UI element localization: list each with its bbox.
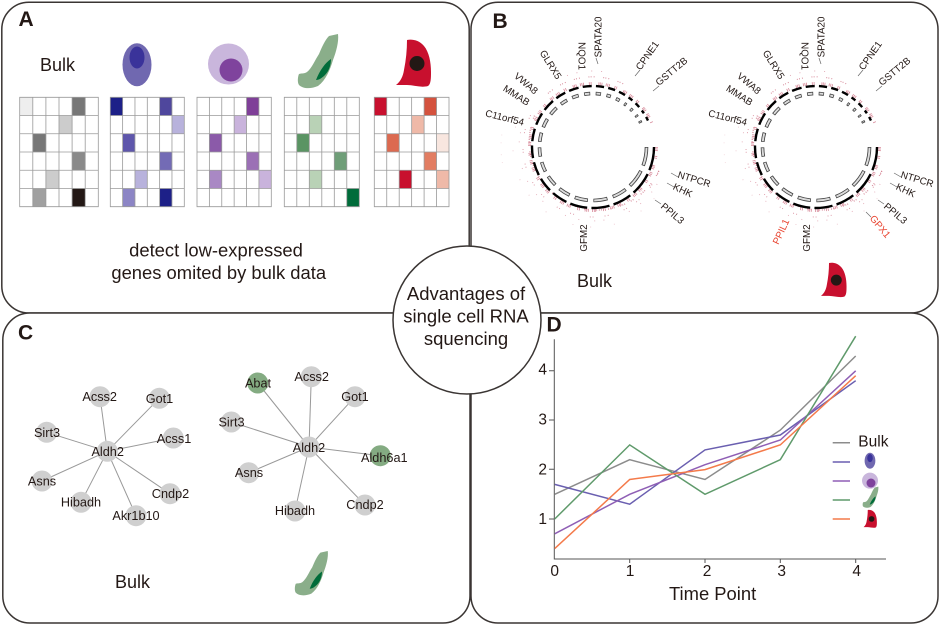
caption: detect low-expressed genes: genes omited by bulk data <box>111 262 327 283</box>
axis title: Time Point <box>669 583 756 604</box>
caption: detect low-expressed genes: detect low-expressed <box>129 240 303 260</box>
icon: green cell <box>295 551 328 595</box>
circular plot: red cell: GPX1 <box>867 213 892 241</box>
network: bulk: Got1 <box>146 392 173 406</box>
heatmap: red cell <box>374 97 449 207</box>
circular plot: red cell: PPIL1 <box>771 218 792 246</box>
legend <box>833 434 889 528</box>
central circle: title <box>393 246 541 394</box>
network: bulk <box>28 386 191 526</box>
line chart: 4 <box>538 362 547 378</box>
circular plot: red cell: GLRX5 <box>760 48 786 82</box>
heatmap: bulk <box>20 97 98 207</box>
line chart: 2 <box>538 462 547 478</box>
icon: red cell <box>396 40 431 87</box>
label: Bulk: Bulk <box>115 572 151 592</box>
circular plot: bulk: GLRX5 <box>537 48 563 82</box>
circular plot: bulk: GFM2 <box>579 224 590 252</box>
line chart: 3 <box>538 412 547 428</box>
network: green cell: Hibadh <box>275 504 315 518</box>
panel D: time course line chart <box>471 313 938 623</box>
circular plot: red cell: MMAB <box>724 83 755 109</box>
icon: green cell <box>298 34 338 88</box>
panel A: low-expressed genes <box>2 2 469 313</box>
line chart: 3 <box>777 563 786 580</box>
line chart: 1 <box>626 563 634 580</box>
label: Bulk: Bulk <box>40 55 76 75</box>
panel letter D: D <box>546 314 562 336</box>
network: bulk: Acss2 <box>82 390 117 404</box>
network: green cell: Abat <box>245 376 272 390</box>
line chart: 0 <box>550 563 559 580</box>
heatmap: purple cell <box>197 97 271 207</box>
circular plot: bulk: NTPCR <box>676 170 712 190</box>
label: Bulk: Bulk <box>577 271 613 291</box>
circular plot: red cell: CPNE1 <box>857 39 885 73</box>
panel letter A: A <box>18 8 34 31</box>
network: bulk: Cndp2 <box>152 487 189 501</box>
network: green cell: Cndp2 <box>346 498 384 512</box>
circular plot: bulk: SPATA20 <box>594 16 604 57</box>
central circle: title: single cell RNA <box>403 306 529 326</box>
network: green cell: Aldh2 <box>293 441 325 455</box>
network: green cell: Sirt3 <box>218 416 245 430</box>
network: green cell: Aldh6a1 <box>361 451 408 465</box>
circular plot: bulk <box>484 16 712 252</box>
network: green cell: Acss2 <box>294 370 329 384</box>
legend: Bulk <box>858 434 889 451</box>
circular plot: bulk: KHK <box>671 182 694 200</box>
circular plot: red cell: NQO1 <box>798 42 810 70</box>
network: bulk: Sirt3 <box>34 426 60 440</box>
panel letter C: C <box>18 322 33 344</box>
circular plot: bulk: C11orf54 <box>484 108 526 129</box>
circular plot: bulk: CPNE1 <box>634 39 662 73</box>
circular plot: red cell: NTPCR <box>899 170 935 190</box>
icon: purple cell <box>208 44 249 84</box>
network: bulk: Hibadh <box>61 496 101 510</box>
line chart: 2 <box>703 563 711 580</box>
network: bulk: Akr1b10 <box>112 509 160 523</box>
network: bulk: Asns <box>28 474 56 488</box>
network: green cell <box>218 366 408 522</box>
heatmap: green cell <box>284 97 359 207</box>
central circle: title: Advantages of <box>407 283 526 304</box>
circular plot: red cell: KHK <box>894 182 917 200</box>
network: green cell: Asns <box>235 466 263 480</box>
network: green cell: Got1 <box>341 390 369 404</box>
central circle: title: squencing <box>424 328 508 349</box>
circular plot: red cell: C11orf54 <box>707 108 749 129</box>
circular plot: bulk: VWA8 <box>511 71 540 97</box>
line chart: 1 <box>538 511 547 528</box>
line chart: 4 <box>852 563 861 580</box>
heatmap: blue cell <box>110 97 184 207</box>
circular plot: red cell <box>707 16 935 252</box>
line chart <box>538 336 886 580</box>
circular plot: bulk: GSTT2B <box>654 55 690 88</box>
panel B: circular gene plots <box>471 2 938 313</box>
icon: red cell <box>821 263 847 297</box>
icon: blue cell <box>122 43 152 86</box>
circular plot: red cell: VWA8 <box>734 71 763 97</box>
circular plot: red cell: GSTT2B <box>877 55 913 88</box>
panel C: gene networks <box>3 313 470 623</box>
circular plot: bulk: NQO1 <box>576 42 586 70</box>
circular plot: red cell: PPIL3 <box>881 201 909 227</box>
network: bulk: Aldh2 <box>91 445 124 459</box>
circular plot: red cell: GFM2 <box>802 224 813 252</box>
network: bulk: Acss1 <box>157 432 191 446</box>
circular plot: bulk: MMAB <box>501 83 532 109</box>
circular plot: bulk: PPIL3 <box>658 201 686 227</box>
circular plot: red cell: SPATA20 <box>816 16 828 57</box>
panel letter B: B <box>492 10 508 33</box>
